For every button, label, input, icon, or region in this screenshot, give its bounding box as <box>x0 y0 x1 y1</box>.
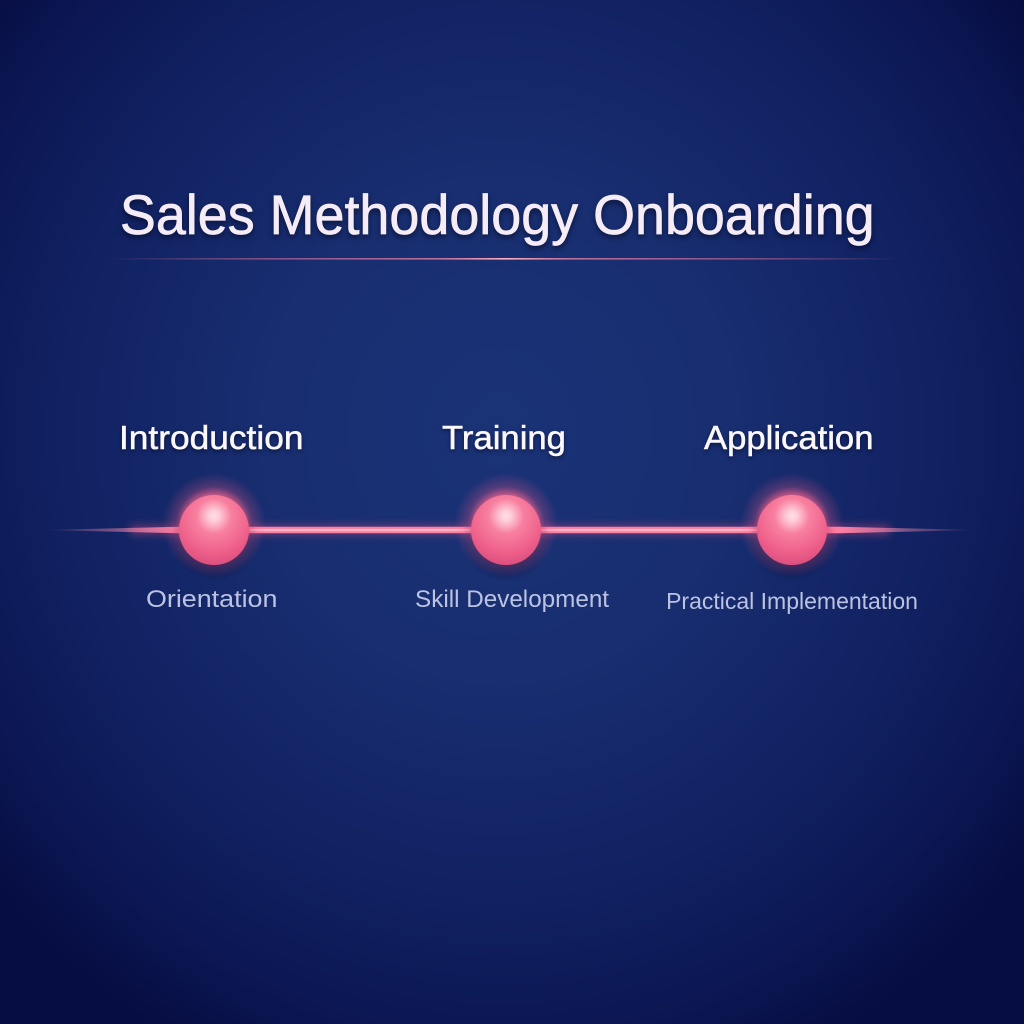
heading: Introduction: Introduction <box>119 419 303 456</box>
heading: Training: Training <box>442 419 566 456</box>
timeline <box>52 475 968 578</box>
node: training <box>454 473 558 582</box>
node: application <box>740 473 844 582</box>
label: Skill Development: Skill Development <box>415 586 609 613</box>
title: Sales Methodology Onboarding <box>120 183 874 246</box>
title underline <box>120 258 890 260</box>
label: Orientation: Orientation <box>146 586 278 613</box>
glowing line <box>42 525 978 535</box>
heading: Application: Application <box>704 419 874 456</box>
label: Practical Implementation: Practical Implementation <box>666 588 918 614</box>
node: introduction <box>162 473 266 582</box>
